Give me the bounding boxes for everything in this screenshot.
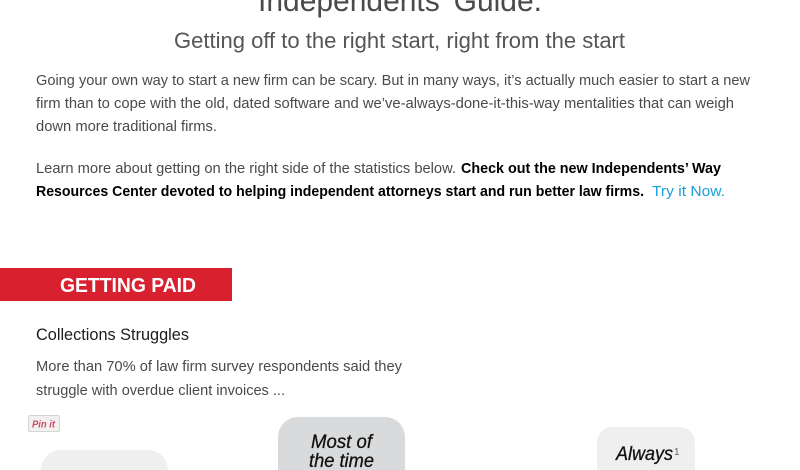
card: always xyxy=(597,427,695,470)
card: most of the time: Most of xyxy=(311,432,374,453)
intro paragraph xyxy=(36,72,750,135)
intro paragraph: firm than to cope with the old, dated software and we’ve-always-done-it-this-way mentalities that can weigh xyxy=(36,95,734,112)
call to action paragraph: Check out the new Independents’ Way xyxy=(461,160,722,177)
card: always: 1 xyxy=(674,447,680,458)
icon: pin it button: Pin it xyxy=(32,418,55,430)
collections text: struggle with overdue client invoices ... xyxy=(36,382,285,399)
icon: pin it button xyxy=(28,416,60,432)
section banner: getting paid xyxy=(0,268,232,301)
section banner: getting paid: GETTING PAID xyxy=(60,275,196,297)
collections text xyxy=(36,358,402,399)
call to action paragraph: Try it Now. xyxy=(652,183,725,200)
call to action paragraph: Learn more about getting on the right side of the statistics below. xyxy=(36,160,456,177)
intro paragraph: down more traditional firms. xyxy=(36,118,217,135)
collections text: More than 70% of law firm survey respondents said they xyxy=(36,358,402,375)
card: always: Always xyxy=(615,444,673,465)
subtitle: Getting off to the right start, right from the start xyxy=(174,28,625,53)
call to action paragraph xyxy=(36,160,725,200)
card: most of the time xyxy=(278,417,405,470)
call to action paragraph: Resources Center devoted to helping independent attorneys start and run better law firms. xyxy=(36,183,644,200)
intro paragraph: Going your own way to start a new firm can be scary. But in many ways, it’s actually much easier to start a new xyxy=(36,72,750,89)
card: left column xyxy=(41,450,168,470)
heading: collections struggles: Collections Struggles xyxy=(36,325,189,344)
